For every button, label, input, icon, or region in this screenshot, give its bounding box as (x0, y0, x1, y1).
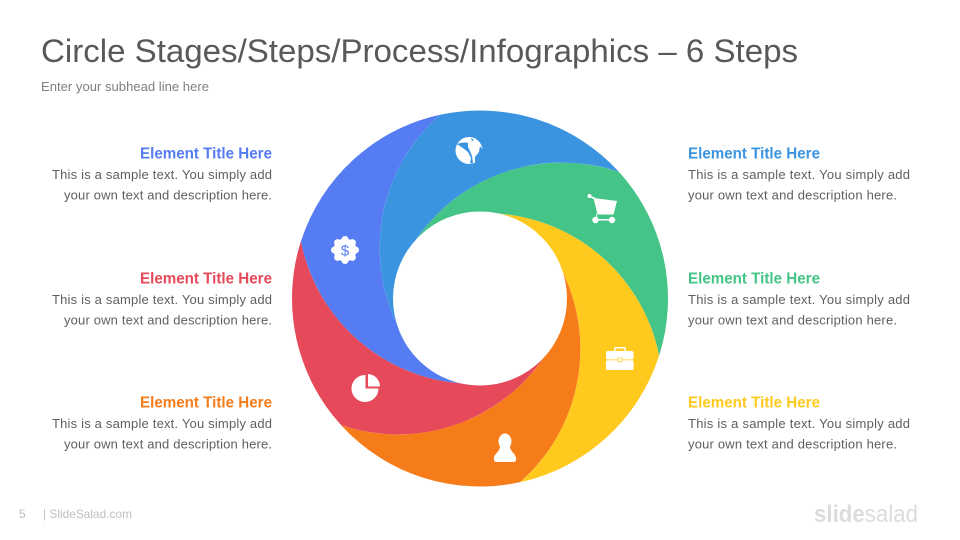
description (688, 167, 910, 202)
heading: Element Title Here (140, 394, 272, 412)
text block: top right (688, 146, 910, 202)
segment: light blue (325, 68, 624, 393)
description (688, 416, 910, 452)
footer source: | SlideSalad.com (43, 507, 132, 521)
segment: yellow (393, 165, 692, 490)
icon: pie chart (352, 374, 380, 402)
description: your own text and description here. (688, 188, 897, 202)
description: This is a sample text. You simply add (688, 167, 910, 182)
description: your own text and description here. (688, 312, 897, 328)
text block: bottom left (52, 394, 272, 452)
heading: Element Title Here (140, 146, 272, 162)
icon: person (494, 434, 516, 462)
description: This is a sample text. You simply add (688, 292, 910, 307)
logo: slidesalad (814, 501, 918, 528)
description (52, 416, 272, 452)
segment: red (292, 241, 556, 434)
description (52, 292, 272, 328)
description: This is a sample text. You simply add (52, 416, 272, 431)
icon: globe (456, 137, 483, 164)
description: This is a sample text. You simply add (52, 167, 272, 182)
text block: bottom right (688, 394, 910, 452)
subhead: Enter your subhead line here (41, 80, 209, 94)
description (52, 167, 272, 202)
heading: Element Title Here (140, 270, 272, 288)
text block: middle right (688, 270, 910, 328)
description: your own text and description here. (64, 188, 272, 202)
spiral donut chart (268, 68, 692, 529)
description: your own text and description here. (64, 312, 272, 328)
heading: Element Title Here (688, 146, 820, 162)
icon: shopping cart (588, 194, 617, 223)
description (688, 292, 910, 328)
heading: Element Title Here (688, 270, 820, 288)
icon: gear with dollar: $ (341, 242, 350, 260)
description: This is a sample text. You simply add (688, 416, 910, 431)
description: your own text and description here. (64, 436, 272, 452)
description: your own text and description here. (688, 436, 897, 452)
segment: periwinkle (268, 107, 567, 432)
icon: briefcase (606, 347, 634, 370)
page number: 5 (19, 507, 26, 521)
icon: gear with dollar (331, 236, 359, 264)
title: Circle Stages/Steps/Process/Infographics – 6 Steps (41, 33, 798, 69)
text block: middle left (52, 270, 272, 328)
description: This is a sample text. You simply add (52, 292, 272, 307)
segment: green (404, 163, 668, 356)
centre hole (393, 212, 567, 386)
segment: orange (336, 204, 635, 529)
heading: Element Title Here (688, 394, 820, 412)
text block: top left (52, 146, 272, 202)
